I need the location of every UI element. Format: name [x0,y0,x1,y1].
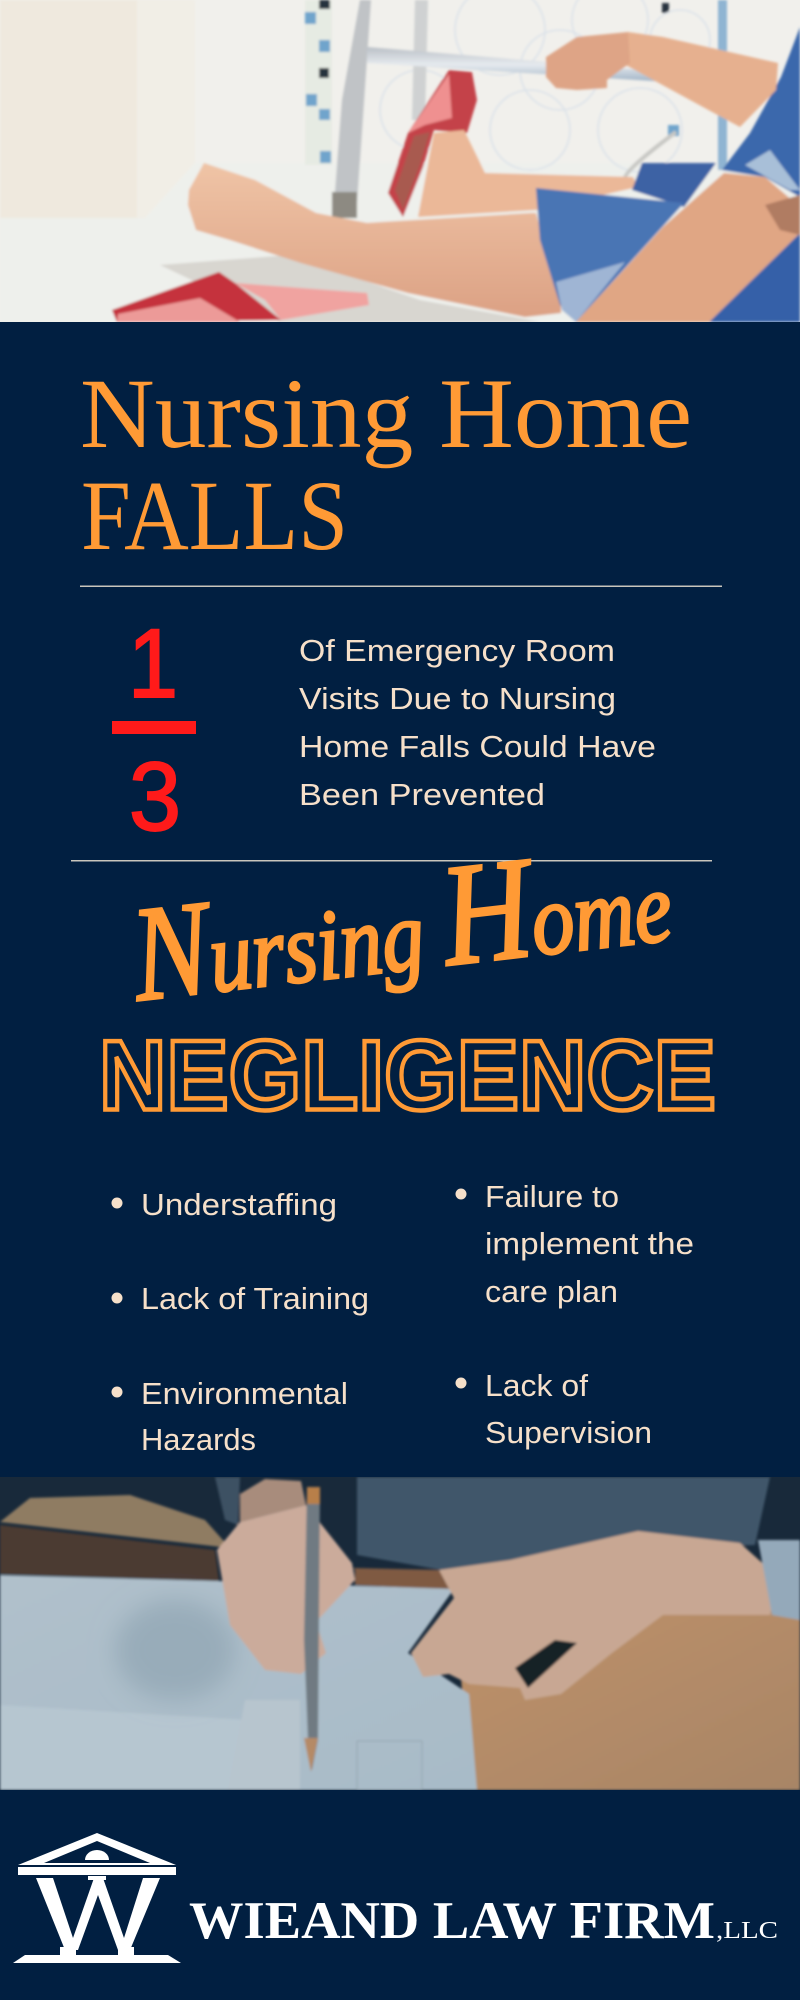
floor slippers [235,283,369,320]
statistic text: Visits Due to Nursing [299,681,616,716]
logo: Wieand Law Firm [13,1833,778,1963]
bullet list: left column [112,1187,369,1457]
bullet list: right column: Lack of [485,1368,588,1403]
title [80,358,692,571]
photo: resident fallen on floor beside walker [0,0,800,322]
bullet list: right column: implement the [485,1226,694,1261]
sleeve [722,27,800,197]
wrist [240,1479,306,1522]
sweater [357,1477,770,1575]
divider [71,860,712,862]
floor shadow under leg [160,255,540,322]
hanging slipper [388,70,477,217]
statistic: one third fraction: 3 [129,742,181,851]
patterned skirt back [632,163,716,207]
skirt [536,188,684,322]
script heading: Nursing Home: Nursing Home [123,812,678,1032]
shirt cuff [758,1540,800,1620]
wood table [350,1568,800,1790]
left hand [217,1505,355,1674]
arm [576,173,800,322]
bullet list: left column: Lack of Training [141,1281,369,1316]
outlined heading: NEGLIGENCE: NEGLIGENCE [99,1020,716,1130]
statistic text [299,633,656,812]
statistic: one third fraction: 1 [128,609,178,718]
photo: hands writing with pencil on paper [0,1477,800,1790]
bullet list: right column: Failure to [485,1179,619,1214]
logo wordmark: WIEAND LAW FIRM [189,1892,715,1950]
near leg and foot [188,163,561,317]
bullet list: left column: Hazards [141,1422,256,1457]
statistic: one third fraction [112,609,196,851]
statistic text: Been Prevented [299,777,545,812]
bullet list: left column: Understaffing [141,1187,337,1222]
statistic text: Home Falls Could Have [299,729,656,764]
paper [0,1575,477,1790]
divider [80,586,722,587]
table edge [0,1525,219,1581]
bullet list: left column: Environmental [141,1376,348,1411]
right hand [411,1531,778,1700]
pencil [304,1487,320,1770]
logo: Wieand Law Firm: ,LLC [716,1918,778,1944]
bullet list: right column [456,1179,694,1450]
title: Nursing Home [80,358,692,469]
logo icon: temple with W [13,1833,181,1963]
statistic text: Of Emergency Room [299,633,615,668]
far leg and foot [418,130,638,217]
bullet list: right column: care plan [485,1274,618,1309]
title: FALLS [81,460,348,571]
hand [546,32,630,90]
bullet list: right column: Supervision [485,1415,652,1450]
